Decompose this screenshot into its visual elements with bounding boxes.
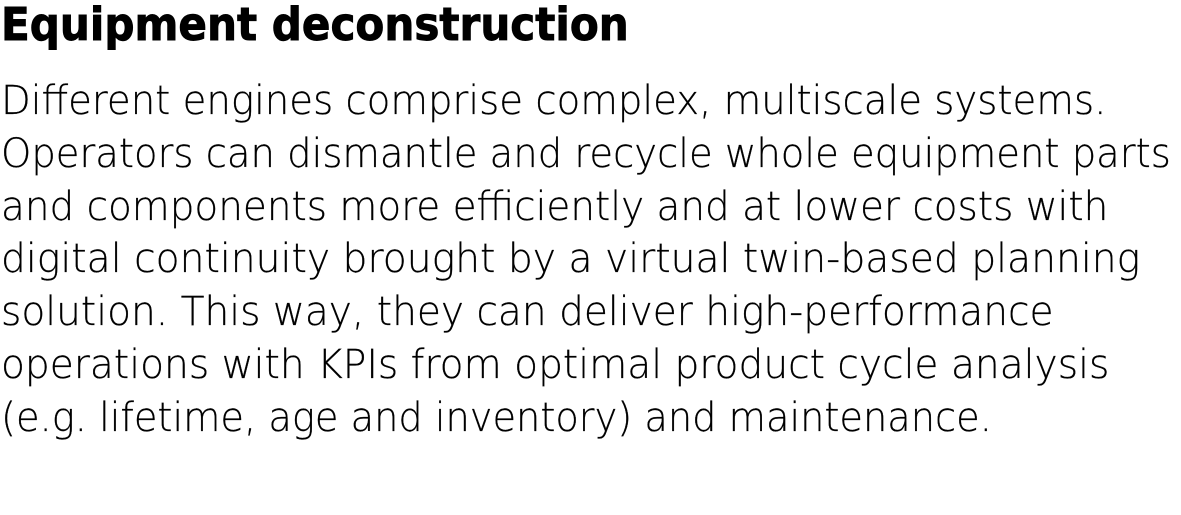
text: solution. This way, they can deliver high-performance bbox=[1, 289, 1054, 335]
text: (e.g. lifetime, age and inventory) and maintenance. bbox=[1, 395, 992, 441]
text: operations with KPIs from optimal product cycle analysis bbox=[1, 342, 1109, 388]
text: digital continuity brought by a virtual twin-based planning bbox=[1, 236, 1140, 282]
text block: description bbox=[1, 78, 1171, 441]
text: Operators can dismantle and recycle whole equipment parts bbox=[1, 131, 1171, 177]
text: and components more efficiently and at lower costs with bbox=[1, 184, 1108, 230]
text: Different engines comprise complex, multiscale systems. bbox=[1, 78, 1106, 124]
